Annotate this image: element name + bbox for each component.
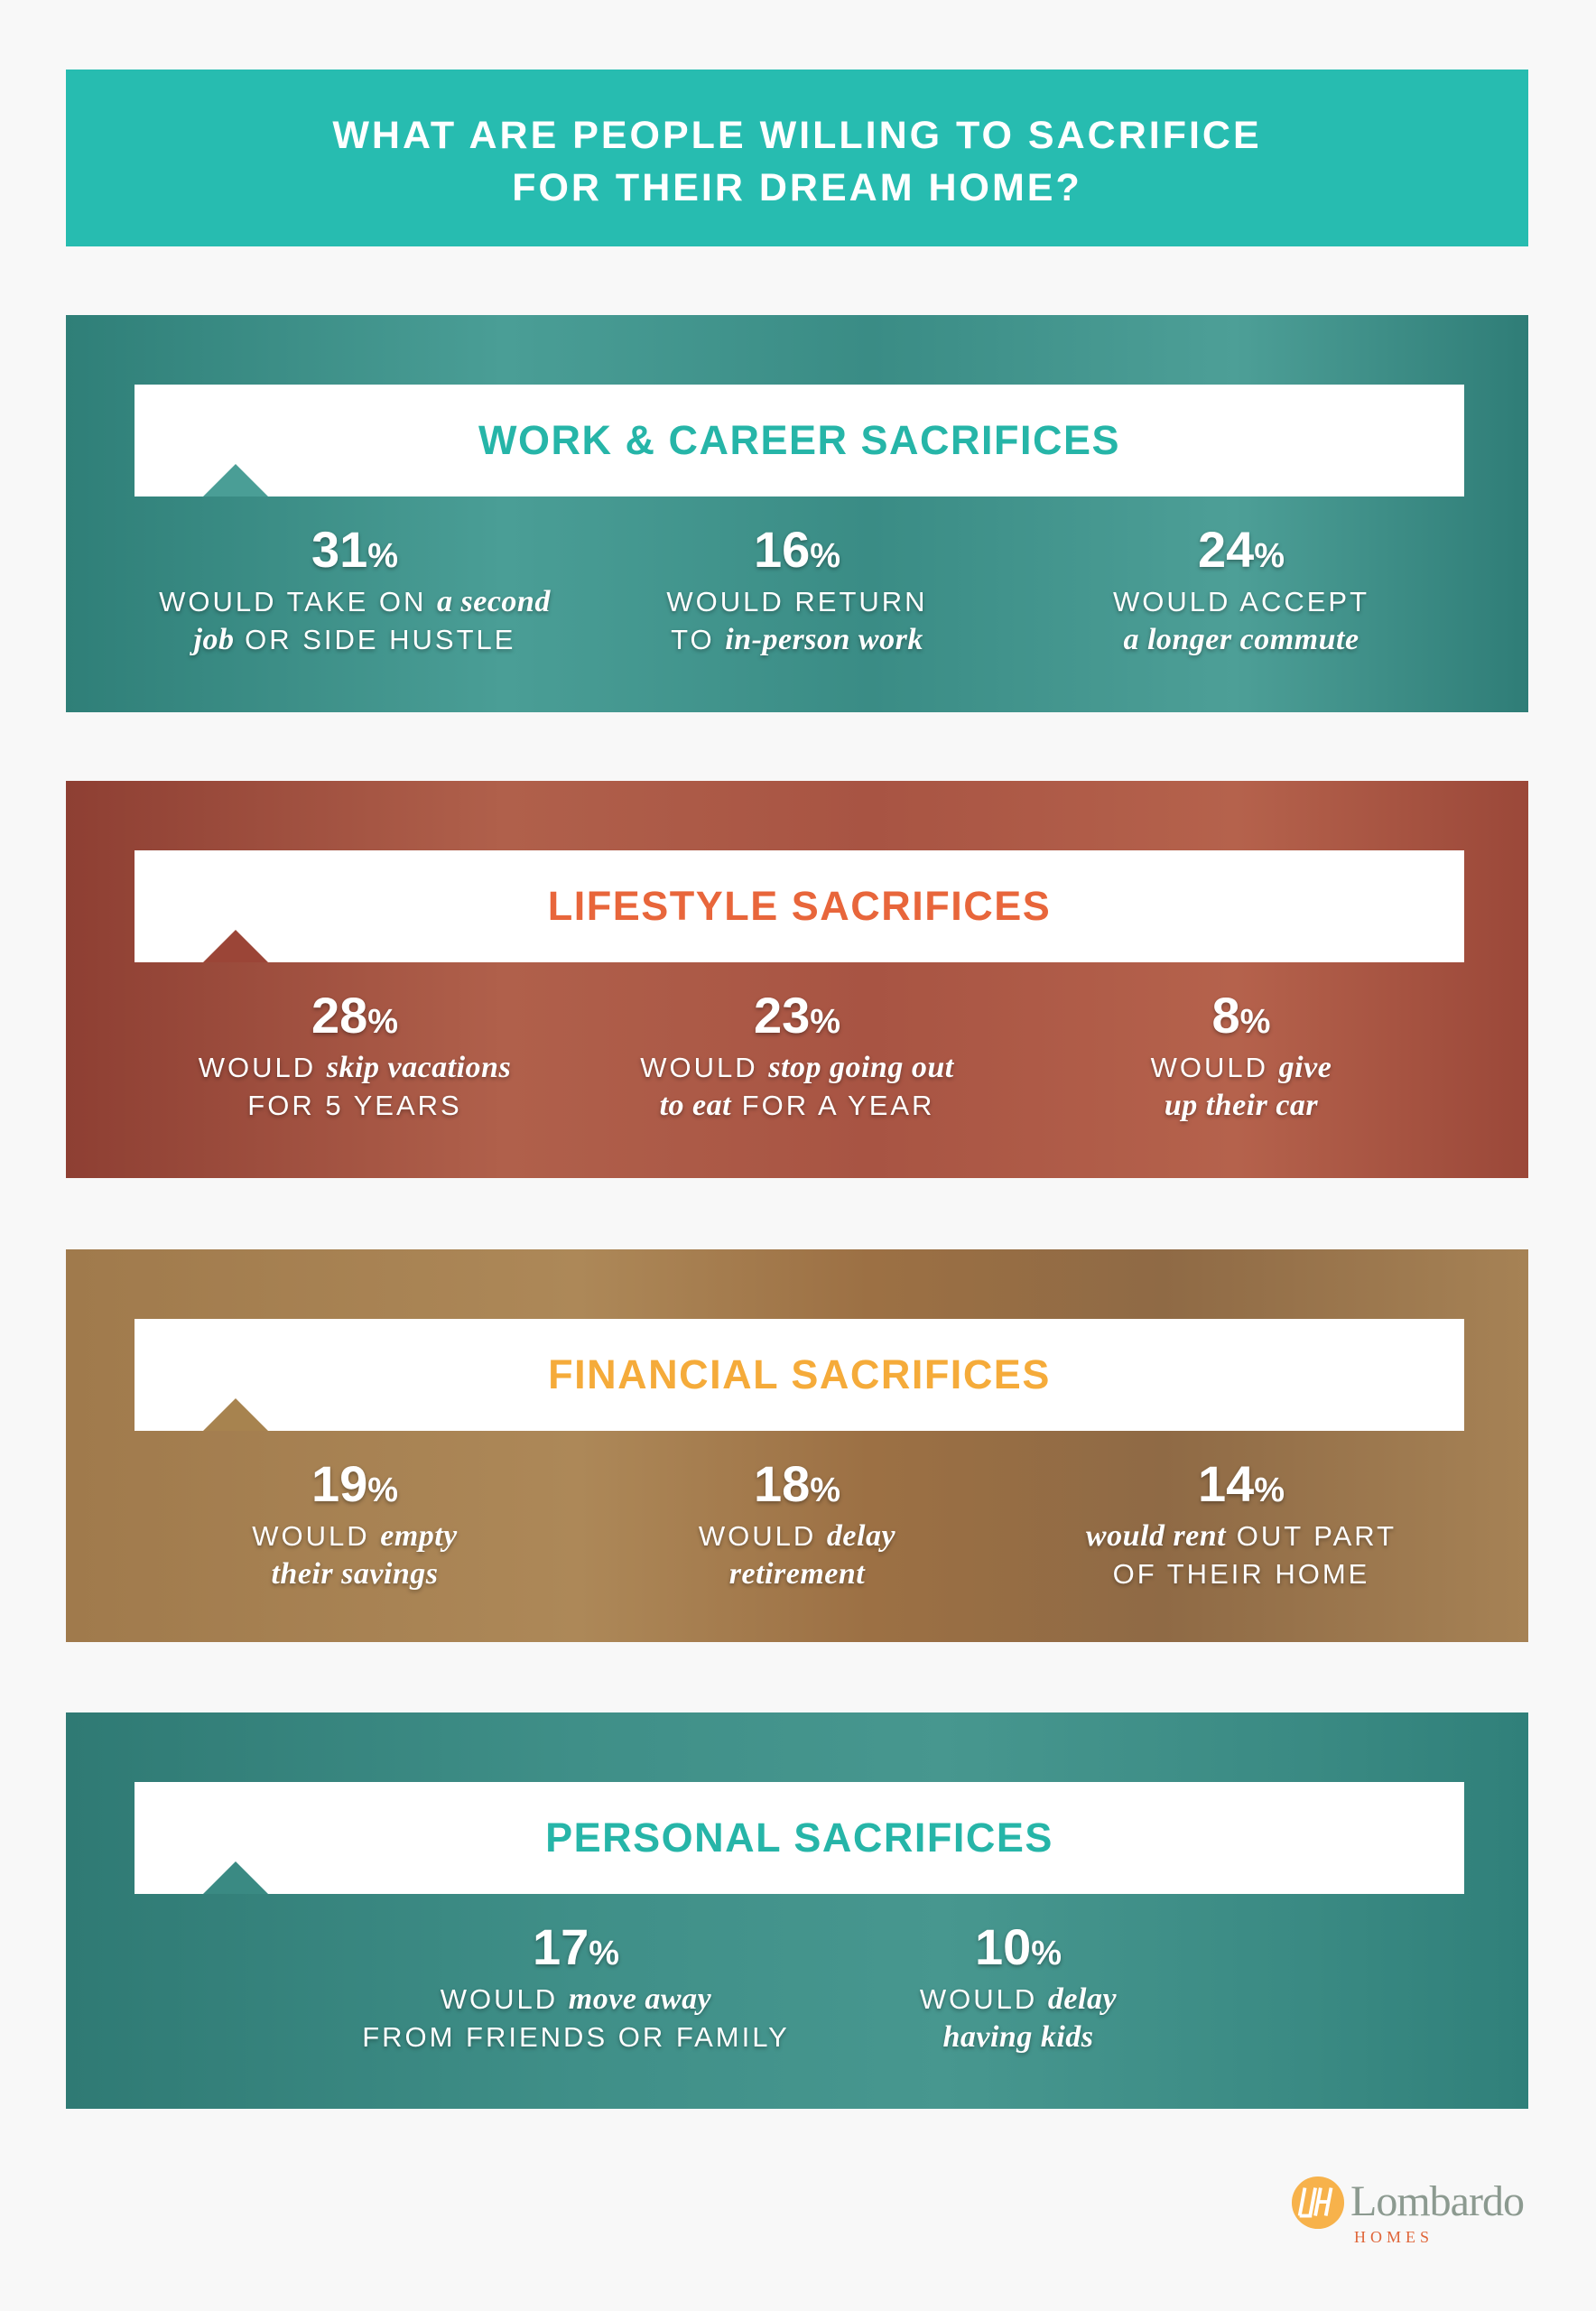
stat 24%: 24% — [1198, 521, 1285, 578]
stat 10%: having kids — [942, 2020, 1094, 2054]
heading: financial — [135, 1319, 1464, 1431]
stat 8%: 8% — [1212, 987, 1270, 1044]
stat 16%: TO in-person work — [671, 623, 923, 656]
stat 24%: a longer commute — [1123, 623, 1359, 656]
stat 31% — [159, 521, 552, 659]
title: FOR THEIR DREAM HOME? — [512, 166, 1082, 209]
title — [66, 70, 1528, 246]
stat 17%: WOULD move away — [441, 1982, 711, 2016]
stat 10%: WOULD delay — [920, 1982, 1117, 2016]
stat 28%: WOULD skip vacations — [199, 1051, 511, 1084]
stat 23%: 23% — [754, 987, 840, 1044]
panel: lifestyle — [66, 781, 1528, 1178]
stat 19%: their savings — [271, 1557, 439, 1591]
stat 8%: up their car — [1165, 1089, 1318, 1122]
stat 23% — [639, 987, 955, 1122]
stat 18%: 18% — [754, 1455, 840, 1512]
stat 19%: 19% — [311, 1455, 398, 1512]
stat 28%: FOR 5 YEARS — [247, 1090, 462, 1121]
stat 19% — [251, 1455, 459, 1593]
panel: work & career — [66, 315, 1528, 712]
pointer triangle — [203, 930, 268, 962]
stat 10% — [919, 1918, 1118, 2056]
stat 31%: job OR SIDE HUSTLE — [194, 623, 515, 656]
panel: personal — [66, 1712, 1528, 2109]
stat 8% — [1150, 987, 1332, 1125]
heading: personal — [135, 1782, 1464, 1894]
stat 16% — [666, 521, 928, 659]
stat 18%: WOULD delay — [699, 1519, 895, 1553]
heading: work & career — [135, 385, 1464, 497]
stat 28%: 28% — [311, 987, 398, 1044]
stat 16%: WOULD RETURN — [666, 586, 928, 617]
pointer triangle — [203, 1398, 268, 1431]
stat 17%: FROM FRIENDS OR FAMILY — [362, 2021, 790, 2053]
heading: financial: FINANCIAL SACRIFICES — [548, 1351, 1051, 1397]
stat 16%: 16% — [754, 521, 840, 578]
stat 17%: 17% — [533, 1918, 619, 1975]
stat 18% — [698, 1455, 896, 1591]
heading: work & career: WORK & CAREER SACRIFICES — [478, 417, 1120, 463]
title: WHAT ARE PEOPLE WILLING TO SACRIFICE — [332, 114, 1262, 157]
heading: personal: PERSONAL SACRIFICES — [545, 1814, 1053, 1861]
stat 14%: would rent OUT PART — [1086, 1519, 1396, 1553]
stat 24% — [1112, 521, 1369, 659]
stat 10%: 10% — [975, 1918, 1062, 1975]
stat 17% — [362, 1918, 790, 2053]
stat 23%: WOULD stop going out — [640, 1051, 954, 1084]
heading: lifestyle: LIFESTYLE SACRIFICES — [548, 883, 1051, 929]
heading: lifestyle — [135, 850, 1464, 962]
icon: LH circle — [1292, 2176, 1344, 2229]
HOMES: HOMES — [1354, 2228, 1434, 2246]
stat 28% — [198, 987, 511, 1121]
stat 24%: WOULD ACCEPT — [1113, 586, 1369, 617]
stat 31%: WOULD TAKE ON a second — [159, 585, 551, 618]
stat 14%: 14% — [1198, 1455, 1285, 1512]
panel: financial — [66, 1249, 1528, 1642]
pointer triangle — [203, 1861, 268, 1894]
logo: Lombardo Homes — [1292, 2176, 1524, 2246]
stat 14%: OF THEIR HOME — [1113, 1558, 1369, 1590]
pointer triangle — [203, 464, 268, 497]
stat 31%: 31% — [311, 521, 398, 578]
stat 14% — [1085, 1455, 1396, 1590]
stat 19%: WOULD empty — [252, 1519, 458, 1553]
stat 8%: WOULD give — [1151, 1051, 1332, 1084]
wordmark: Lombardo — [1350, 2177, 1524, 2225]
stat 18%: retirement — [729, 1557, 865, 1591]
stat 23%: to eat FOR A YEAR — [660, 1089, 934, 1122]
